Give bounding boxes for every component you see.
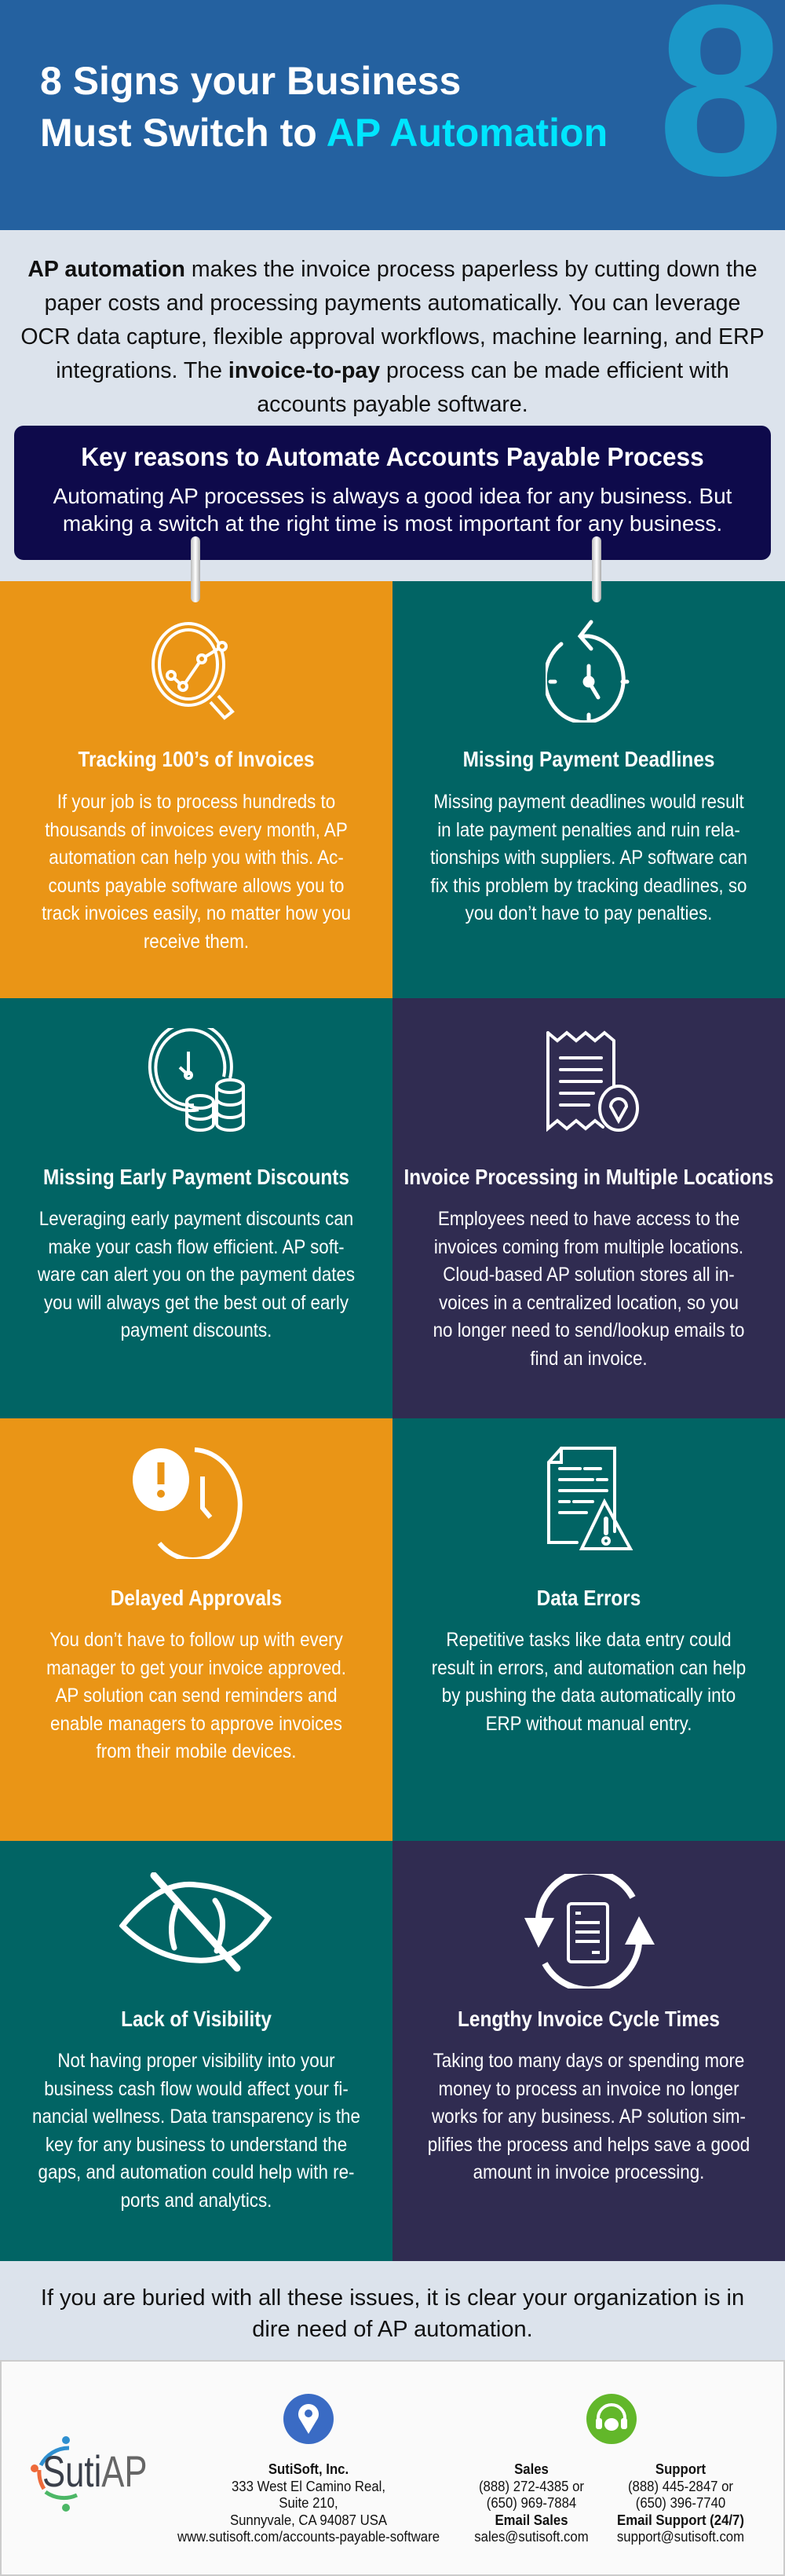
- logo: SutiAP: [42, 2446, 148, 2496]
- body text: works for any business. AP solution sim-: [432, 2106, 746, 2128]
- sales contact: sales@sutisoft.com: [474, 2529, 589, 2545]
- body text: ERP without manual entry.: [486, 1712, 692, 1734]
- body text: business cash flow would affect your fi-: [44, 2078, 349, 2100]
- support contact: Support: [655, 2461, 706, 2477]
- body text: enable managers to approve invoices: [50, 1712, 342, 1734]
- footer: [0, 2360, 785, 2576]
- body text: key for any business to understand the: [46, 2133, 347, 2155]
- body text: payment discounts.: [121, 1319, 272, 1341]
- company address: Suite 210,: [279, 2495, 338, 2511]
- body text: If your job is to process hundreds to: [57, 791, 335, 813]
- body text: [433, 1208, 744, 1370]
- body text: Not having proper visibility into your: [57, 2050, 335, 2072]
- title: [40, 59, 608, 155]
- conclusion text: [41, 2285, 744, 2342]
- body text: Repetitive tasks like data entry could: [446, 1629, 732, 1651]
- icon: magnifier chart: [152, 622, 235, 720]
- body text: [428, 2050, 750, 2183]
- support contact: support@sutisoft.com: [617, 2529, 744, 2545]
- body text: fix this problem by tracking deadlines, so: [431, 875, 747, 897]
- body text: in late payment penalties and ruin rela-: [437, 818, 740, 840]
- connector: left: [191, 536, 200, 602]
- sales contact: (650) 969-7884: [487, 2495, 576, 2511]
- body text: nancial wellness. Data transparency is the: [32, 2106, 360, 2128]
- title: Invoice Processing in Multiple Locations: [403, 1165, 774, 1189]
- body text: [430, 791, 747, 924]
- company address: 333 West El Camino Real,: [232, 2479, 385, 2494]
- title: Delayed Approvals: [111, 1586, 282, 1610]
- icon: clock and coins: [148, 1028, 245, 1132]
- icon: crossed eye: [119, 1872, 272, 1971]
- icon: alert clock: [133, 1447, 243, 1559]
- intro text: AP automation makes the invoice process paperless by cutting down the: [27, 257, 758, 282]
- body text: automation can help you with this. Ac-: [49, 847, 344, 869]
- panel: lengthy invoice cycle times: [392, 1841, 785, 2261]
- body text: Missing payment deadlines would result: [433, 791, 744, 813]
- sales contact: Sales: [514, 2461, 549, 2477]
- support contact: [617, 2461, 744, 2545]
- box heading: Key reasons to Automate Accounts Payable Process: [81, 442, 704, 471]
- body text: plifies the process and helps save a good: [428, 2133, 750, 2155]
- body text: ware can alert you on the payment dates: [38, 1264, 355, 1286]
- body text: [432, 1629, 746, 1734]
- body text: you will always get the best out of early: [44, 1291, 349, 1313]
- title: Lack of Visibility: [121, 2007, 272, 2031]
- support contact: (650) 396-7740: [636, 2495, 725, 2511]
- header: [0, 0, 785, 230]
- panel: data errors: [392, 1418, 785, 1841]
- box text: [53, 484, 732, 536]
- body text: You don’t have to follow up with every: [49, 1629, 343, 1651]
- title: Missing Payment Deadlines: [463, 747, 714, 771]
- title: Must Switch to AP Automation: [40, 111, 608, 155]
- icon: cycle document: [524, 1874, 655, 1989]
- body text: thousands of invoices every month, AP: [45, 818, 348, 840]
- intro text: accounts payable software.: [257, 392, 528, 417]
- panel: invoice processing in multiple locations: [392, 998, 785, 1418]
- panel: tracking invoices: [0, 581, 392, 998]
- title: Data Errors: [537, 1586, 641, 1610]
- title: 8 Signs your Business: [40, 59, 461, 103]
- body text: invoices coming from multiple locations.: [434, 1236, 743, 1258]
- body text: by pushing the data automatically into: [442, 1685, 736, 1707]
- body text: [46, 1629, 346, 1762]
- support contact: Email Support (24/7): [617, 2512, 744, 2527]
- conclusion text: If you are buried with all these issues, it is clear your organization is in: [41, 2285, 744, 2311]
- body text: [38, 1208, 355, 1341]
- panel: lack of visibility: [0, 1841, 392, 2261]
- intro text: [20, 257, 765, 417]
- body text: ports and analytics.: [121, 2190, 272, 2212]
- icon: document with warning: [547, 1447, 633, 1550]
- icon: clock with arrow: [546, 620, 630, 723]
- icon: receipt with pin: [546, 1030, 639, 1132]
- intro text: paper costs and processing payments automatically. You can leverage: [45, 291, 740, 316]
- sales contact: (888) 272-4385 or: [479, 2479, 584, 2494]
- box text: Automating AP processes is always a good idea for any business. But: [53, 484, 732, 508]
- key reasons box: [14, 426, 771, 560]
- body text: counts payable software allows you to: [49, 875, 344, 897]
- sales contact: [474, 2461, 589, 2545]
- panel: missing payment deadlines: [392, 581, 785, 998]
- body text: manager to get your invoice approved.: [46, 1657, 346, 1679]
- body text: make your cash flow efficient. AP soft-: [48, 1236, 345, 1258]
- body text: AP solution can send reminders and: [55, 1685, 338, 1707]
- body text: amount in invoice processing.: [473, 2161, 704, 2183]
- body text: Leveraging early payment discounts can: [39, 1208, 353, 1230]
- intro text: OCR data capture, flexible approval workflows, machine learning, and ERP: [20, 324, 765, 349]
- intro text: integrations. The invoice-to-pay process can be made efficient with: [56, 358, 729, 383]
- body text: receive them.: [144, 930, 249, 952]
- connector: right: [592, 536, 601, 602]
- body text: no longer need to send/lookup emails to: [433, 1319, 744, 1341]
- body text: from their mobile devices.: [97, 1740, 296, 1762]
- body text: Employees need to have access to the: [438, 1208, 739, 1230]
- company address: [177, 2461, 440, 2545]
- conclusion text: dire need of AP automation.: [252, 2317, 533, 2342]
- body text: gaps, and automation could help with re-: [38, 2161, 355, 2183]
- company address: www.sutisoft.com/accounts-payable-software: [177, 2529, 440, 2545]
- box text: making a switch at the right time is most important for any business.: [63, 511, 722, 536]
- icon: location pin: [283, 2394, 334, 2444]
- icon: headset: [586, 2394, 637, 2444]
- body text: tionships with suppliers. AP software can: [430, 847, 747, 869]
- body text: find an invoice.: [530, 1348, 648, 1370]
- company address: SutiSoft, Inc.: [268, 2461, 349, 2477]
- logo: [31, 2436, 148, 2512]
- body text: [42, 791, 351, 952]
- body text: track invoices easily, no matter how you: [42, 902, 351, 924]
- body text: Taking too many days or spending more: [433, 2050, 744, 2072]
- panel: missing early payment discounts: [0, 998, 392, 1418]
- sales contact: Email Sales: [495, 2512, 568, 2527]
- body text: [32, 2050, 360, 2212]
- title: Tracking 100’s of Invoices: [78, 747, 315, 771]
- title: Missing Early Payment Discounts: [43, 1165, 349, 1189]
- company address: Sunnyvale, CA 94087 USA: [230, 2512, 387, 2527]
- body text: result in errors, and automation can help: [432, 1657, 746, 1679]
- body text: Cloud-based AP solution stores all in-: [443, 1264, 735, 1286]
- panel: delayed approvals: [0, 1418, 392, 1841]
- title: Lengthy Invoice Cycle Times: [458, 2007, 720, 2031]
- body text: money to process an invoice no longer: [438, 2078, 739, 2100]
- body text: voices in a centralized location, so you: [439, 1291, 739, 1313]
- body text: you don’t have to pay penalties.: [466, 902, 712, 924]
- support contact: (888) 445-2847 or: [628, 2479, 733, 2494]
